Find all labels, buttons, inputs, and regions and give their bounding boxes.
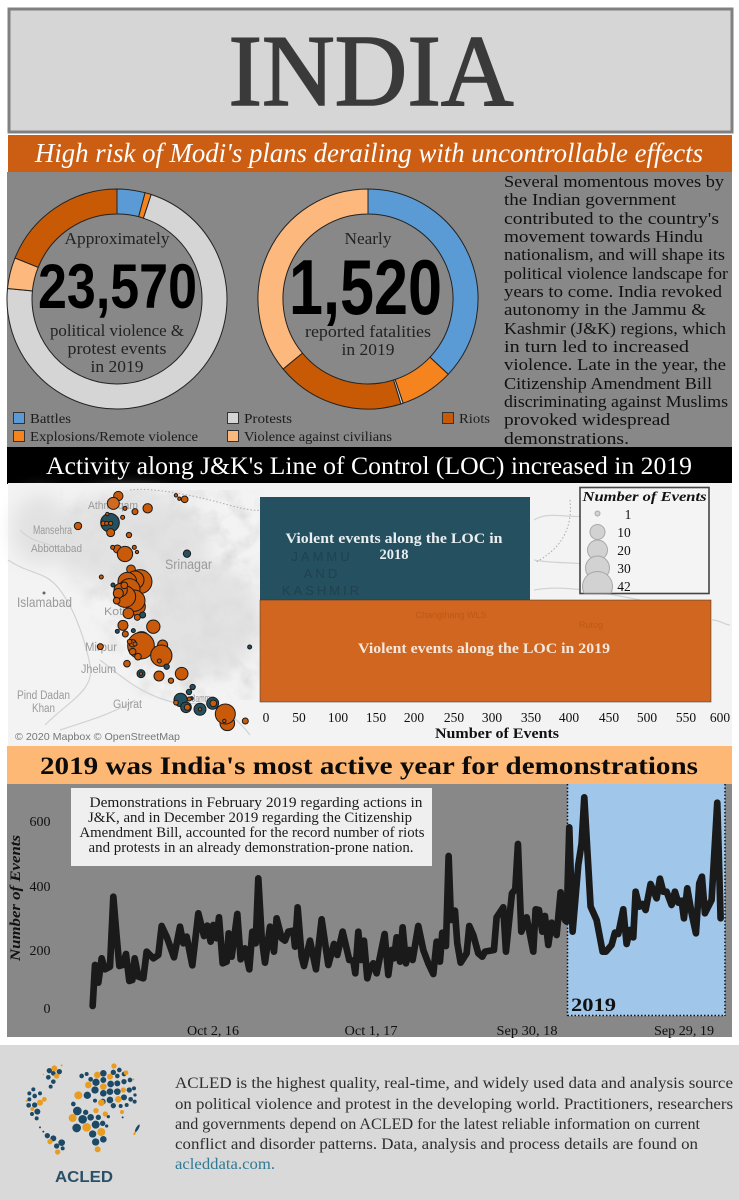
map place labels: Pind Dadan xyxy=(17,690,70,702)
text block: summary: in turn led to increased xyxy=(504,337,690,356)
panel: overview xyxy=(7,172,732,448)
map place labels: Islamabad xyxy=(17,594,72,610)
donut chart: events xyxy=(7,189,227,409)
text block: summary: Kashmir (J&K) regions, which xyxy=(504,319,727,338)
map place labels: Srinagar xyxy=(165,556,212,572)
callout xyxy=(71,788,432,866)
bar: 2019 events: Changthang WLS xyxy=(415,610,487,620)
section heading: LOC: Activity along J&K's Line of Control (LOC) increased in 2019 xyxy=(46,453,692,480)
title xyxy=(9,9,732,132)
icon: ACLED logo: ACLED xyxy=(55,1169,113,1186)
text block: summary: the Indian government xyxy=(504,190,676,209)
map place labels: Gujrat xyxy=(113,699,143,711)
bar chart axis: 100 xyxy=(328,710,348,725)
map place labels: Jhelum xyxy=(81,664,116,676)
map place labels: Abbottabad xyxy=(31,543,82,555)
text block: summary: Citizenship Amendment Bill xyxy=(504,374,712,393)
bar: 2018 events xyxy=(260,497,530,600)
panel: demonstrations line chart xyxy=(7,784,732,1039)
donut centre text: events: in 2019 xyxy=(90,357,144,376)
callout: Amendment Bill, accounted for the record number of riots xyxy=(80,825,425,841)
text block: summary: nationalism, and will shape its xyxy=(504,245,725,264)
y axis: 0 xyxy=(44,1002,50,1017)
bar: 2018 events: 2018 xyxy=(380,547,408,563)
section heading: demonstrations: 2019 was India's most active year for demonstrations xyxy=(40,753,698,780)
legend: event types: Explosions/Remote violence xyxy=(30,430,198,445)
text block: summary: political violence landscape for xyxy=(504,264,729,283)
map place labels: Mansehra xyxy=(33,525,72,537)
donut centre text: events xyxy=(38,229,197,376)
map place labels: Khan xyxy=(32,703,55,715)
y axis xyxy=(8,815,50,1017)
text block: about ACLED xyxy=(175,1075,733,1173)
donut centre text: fatalities: Nearly xyxy=(344,229,392,248)
bar: 2018 events: AND xyxy=(304,566,340,581)
bar: 2018 events: KASHMIR xyxy=(282,583,362,598)
text block: summary xyxy=(504,172,729,448)
bar chart axis: 150 xyxy=(366,710,386,725)
x axis: Sep 29, 19 xyxy=(654,1024,714,1039)
callout: and protests in an already demonstration-prone nation. xyxy=(88,840,414,856)
bar chart axis: Number of Events xyxy=(435,726,559,742)
text block: summary: movement towards Hindu xyxy=(504,227,703,246)
panel: map of LOC events xyxy=(8,483,732,746)
footer panel xyxy=(0,1045,739,1200)
bar chart axis: 300 xyxy=(482,710,502,725)
donut centre text: events: political violence & xyxy=(50,321,184,340)
line: weekly demonstrations xyxy=(93,797,721,1006)
x axis: Sep 30, 18 xyxy=(496,1024,558,1039)
callout: J&K, and in December 2019 regarding the Citizenship xyxy=(88,810,412,826)
donut centre text: events: Approximately xyxy=(64,229,170,248)
bar: 2018 events: Violent events along the LOC in xyxy=(286,531,502,547)
text block: about ACLED: conflict and disorder patterns. Data, analysis and process details are found on xyxy=(175,1136,698,1153)
x axis xyxy=(187,1024,714,1039)
donut centre text: fatalities xyxy=(289,229,442,359)
text block: summary: violence. Late in the year, the xyxy=(504,355,726,374)
bar chart axis: 500 xyxy=(637,710,657,725)
text block: summary: Several momentous moves by xyxy=(504,172,725,191)
bar: 2019 events: Violent events along the LOC in 2019 xyxy=(358,641,610,657)
donut centre text: fatalities: 1,520 xyxy=(289,243,442,331)
text block: summary: years to come. India revoked xyxy=(504,282,723,301)
bar chart axis: 400 xyxy=(559,710,579,725)
y axis: 400 xyxy=(30,880,50,895)
map place labels xyxy=(17,500,214,715)
legend: event types: Riots xyxy=(459,412,490,427)
callout: Demonstrations in February 2019 regarding actions in xyxy=(90,795,423,811)
text block: about ACLED: on political violence and protest in the developing world. Practitioners, researchers xyxy=(175,1096,733,1113)
donut centre text: events: 23,570 xyxy=(38,252,197,322)
bar: 2019 events xyxy=(260,600,711,702)
bar chart axis: 600 xyxy=(710,710,730,725)
legend: event types: Battles xyxy=(30,412,71,427)
bar chart axis: 550 xyxy=(676,710,696,725)
text block: summary: contributed to the country's xyxy=(504,209,719,228)
y axis: Number of Events xyxy=(8,835,24,962)
legend: event types: Protests xyxy=(244,412,292,427)
text block: summary: discriminating against Muslims xyxy=(504,392,728,411)
legend: bubble size: Number of Events xyxy=(581,490,707,505)
highlight: 2019: 2019 xyxy=(571,995,616,1016)
legend: bubble size: 10 xyxy=(617,525,631,540)
legend: bubble size: 30 xyxy=(617,561,631,576)
highlight: 2019 xyxy=(568,784,725,1016)
donut chart: fatalities xyxy=(258,189,478,409)
y axis: 600 xyxy=(30,815,50,830)
map attribution: © 2020 Mapbox © OpenStreetMap xyxy=(15,731,180,743)
map place labels: Mirpur xyxy=(85,642,117,654)
text block: about ACLED: ACLED is the highest quality, real-time, and widely used data and analysis source xyxy=(175,1075,733,1092)
legend: event types xyxy=(14,412,490,445)
y axis: 200 xyxy=(30,944,50,959)
map place labels: Jammu xyxy=(192,693,214,705)
x axis: Oct 1, 17 xyxy=(344,1024,398,1039)
bar chart axis: 200 xyxy=(404,710,424,725)
event bubbles on map xyxy=(74,491,252,731)
map place labels: Athmuqam xyxy=(88,500,138,512)
donut centre text: fatalities: reported fatalities xyxy=(305,322,431,341)
text block: summary: autonomy in the Jammu & xyxy=(504,300,706,319)
x axis: Oct 2, 16 xyxy=(187,1024,239,1039)
legend: bubble size xyxy=(580,488,709,594)
map terrain xyxy=(8,489,730,735)
bar: 2018 events: JAMMU xyxy=(291,549,353,564)
icon: ACLED logo xyxy=(26,1063,141,1186)
title: INDIA xyxy=(228,15,514,128)
legend: event types: Violence against civilians xyxy=(244,430,392,445)
text block: summary: demonstrations. xyxy=(504,429,629,448)
bar chart axis xyxy=(263,710,730,742)
legend: bubble size: 20 xyxy=(617,543,631,558)
donut centre text: fatalities: in 2019 xyxy=(342,340,394,359)
text block: summary: provoked widespread xyxy=(504,410,671,429)
bar chart axis: 250 xyxy=(444,710,464,725)
donut centre text: events: protest events xyxy=(68,339,166,358)
bar chart axis: 450 xyxy=(599,710,619,725)
map place labels: Kotli xyxy=(104,606,128,618)
text block: about ACLED: and governments depend on ACLED for the latest reliable information on current xyxy=(175,1116,701,1133)
legend: bubble size: 42 xyxy=(617,579,631,594)
section heading: demonstrations xyxy=(7,746,732,785)
bar chart axis: 0 xyxy=(263,710,270,725)
subtitle banner: High risk of Modi's plans derailing with uncontrollable effects xyxy=(34,138,703,168)
legend: bubble size: 1 xyxy=(625,507,631,522)
bar: 2019 events: Rutog xyxy=(579,620,603,630)
bar chart axis: 350 xyxy=(521,710,541,725)
section heading: LOC xyxy=(7,447,732,484)
bar chart axis: 50 xyxy=(292,710,306,725)
text block: about ACLED: acleddata.com. xyxy=(175,1156,275,1173)
